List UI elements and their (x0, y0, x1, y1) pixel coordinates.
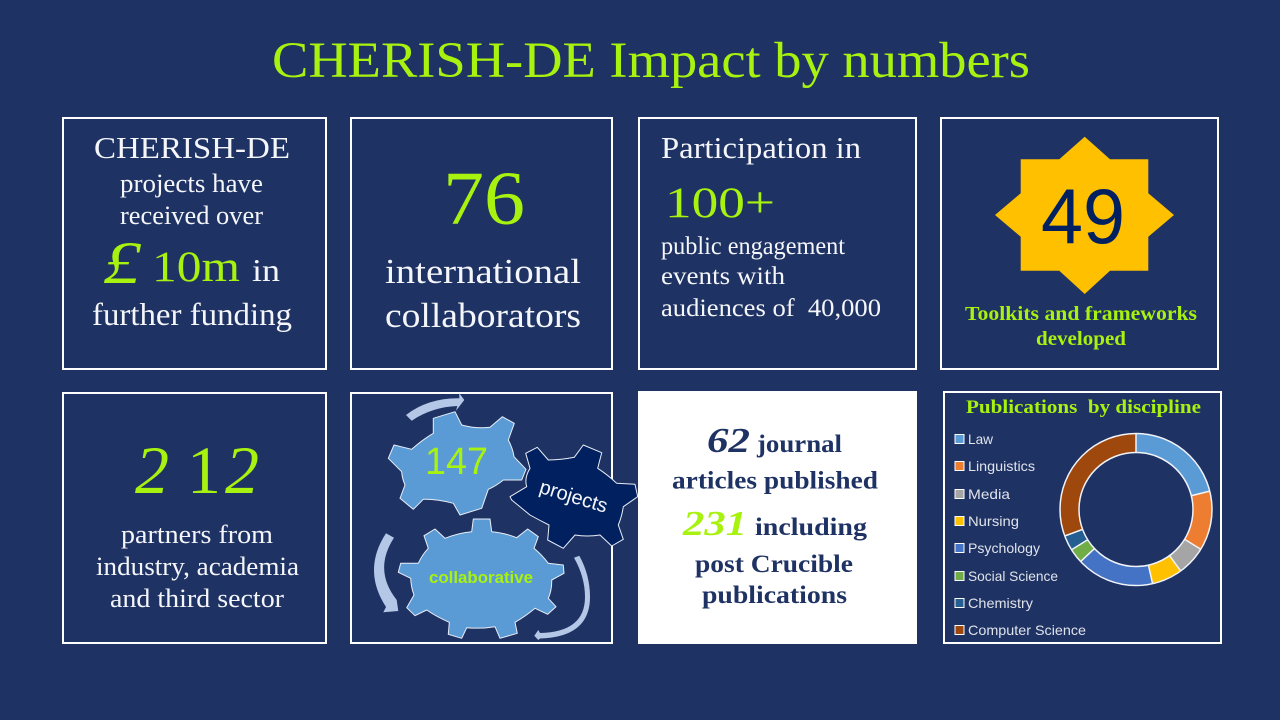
figure: 10m: 10m (152, 244, 240, 291)
text: developed: developed (1036, 328, 1126, 350)
panel: toolkits and frameworks (941, 118, 1218, 369)
icon: top arrow (406, 393, 464, 421)
icon: gear collaborative (398, 519, 564, 638)
panel: journal articles (638, 391, 917, 644)
legend: Law (968, 431, 994, 447)
figure: 147: 147 (425, 441, 488, 483)
text: and third sector: and third sector (110, 584, 284, 613)
figure: 49: 49 (1041, 172, 1125, 260)
text: industry, academia: industry, academia (96, 552, 299, 581)
text: further funding: further funding (92, 296, 292, 332)
text: Toolkits and frameworks: Toolkits and frameworks (965, 303, 1197, 325)
legend: Linguistics (968, 458, 1035, 474)
text: publications: publications (702, 582, 847, 609)
text: CHERISH-DE: CHERISH-DE (94, 130, 290, 165)
figure: 76: 76 (443, 157, 525, 241)
text: projects: projects (537, 476, 610, 518)
panel: publications by discipline (944, 392, 1221, 643)
icon: star badge (995, 137, 1174, 294)
heading: Publications by discipline: Publications by discipline (966, 397, 1201, 418)
figure: 212: 2 (135, 432, 169, 508)
figure: 231: 231 (682, 504, 747, 543)
legend: Social Science (968, 568, 1058, 584)
figure: 62: 62 (707, 421, 750, 460)
text: Participation in: Participation in (661, 130, 862, 165)
title: CHERISH-DE Impact by numbers (272, 33, 1030, 89)
legend (955, 431, 1086, 638)
icon: left arrow (374, 533, 398, 612)
text: international: international (385, 252, 581, 291)
panel: collaborative projects (351, 393, 638, 643)
chart: donut (1060, 434, 1212, 586)
figure: 100+: 100+ (665, 180, 775, 227)
text: journal: journal (756, 431, 842, 458)
figure: 212: 1 (187, 432, 221, 508)
text: projects have: projects have (120, 169, 263, 198)
legend: Nursing (968, 513, 1019, 529)
text: including: including (755, 514, 868, 541)
text: collaborators: collaborators (385, 296, 581, 335)
legend: Psychology (968, 540, 1040, 556)
icon: right arrow (534, 556, 590, 640)
icon: gear projects (510, 445, 638, 548)
legend: Media (968, 486, 1010, 502)
panel: partners (63, 393, 326, 643)
text: in: in (252, 252, 280, 288)
text: audiences of 40,000: audiences of 40,000 (661, 295, 881, 322)
legend: Computer Science (968, 622, 1086, 638)
panel: public engagement (639, 118, 916, 369)
text: partners from: partners from (121, 520, 273, 549)
legend: Chemistry (968, 595, 1033, 611)
panel: international collaborators (351, 118, 612, 369)
panel: further funding (63, 118, 326, 369)
icon: gear 147 (388, 412, 526, 515)
text: received over: received over (120, 201, 263, 230)
text: public engagement: public engagement (661, 233, 845, 260)
figure: pound sign: £ (103, 230, 142, 296)
text: events with: events with (661, 263, 786, 290)
text: articles published: articles published (672, 468, 878, 494)
figure: 212: 2 (225, 432, 259, 508)
text: post Crucible: post Crucible (695, 551, 853, 578)
text: collaborative: collaborative (429, 568, 533, 587)
